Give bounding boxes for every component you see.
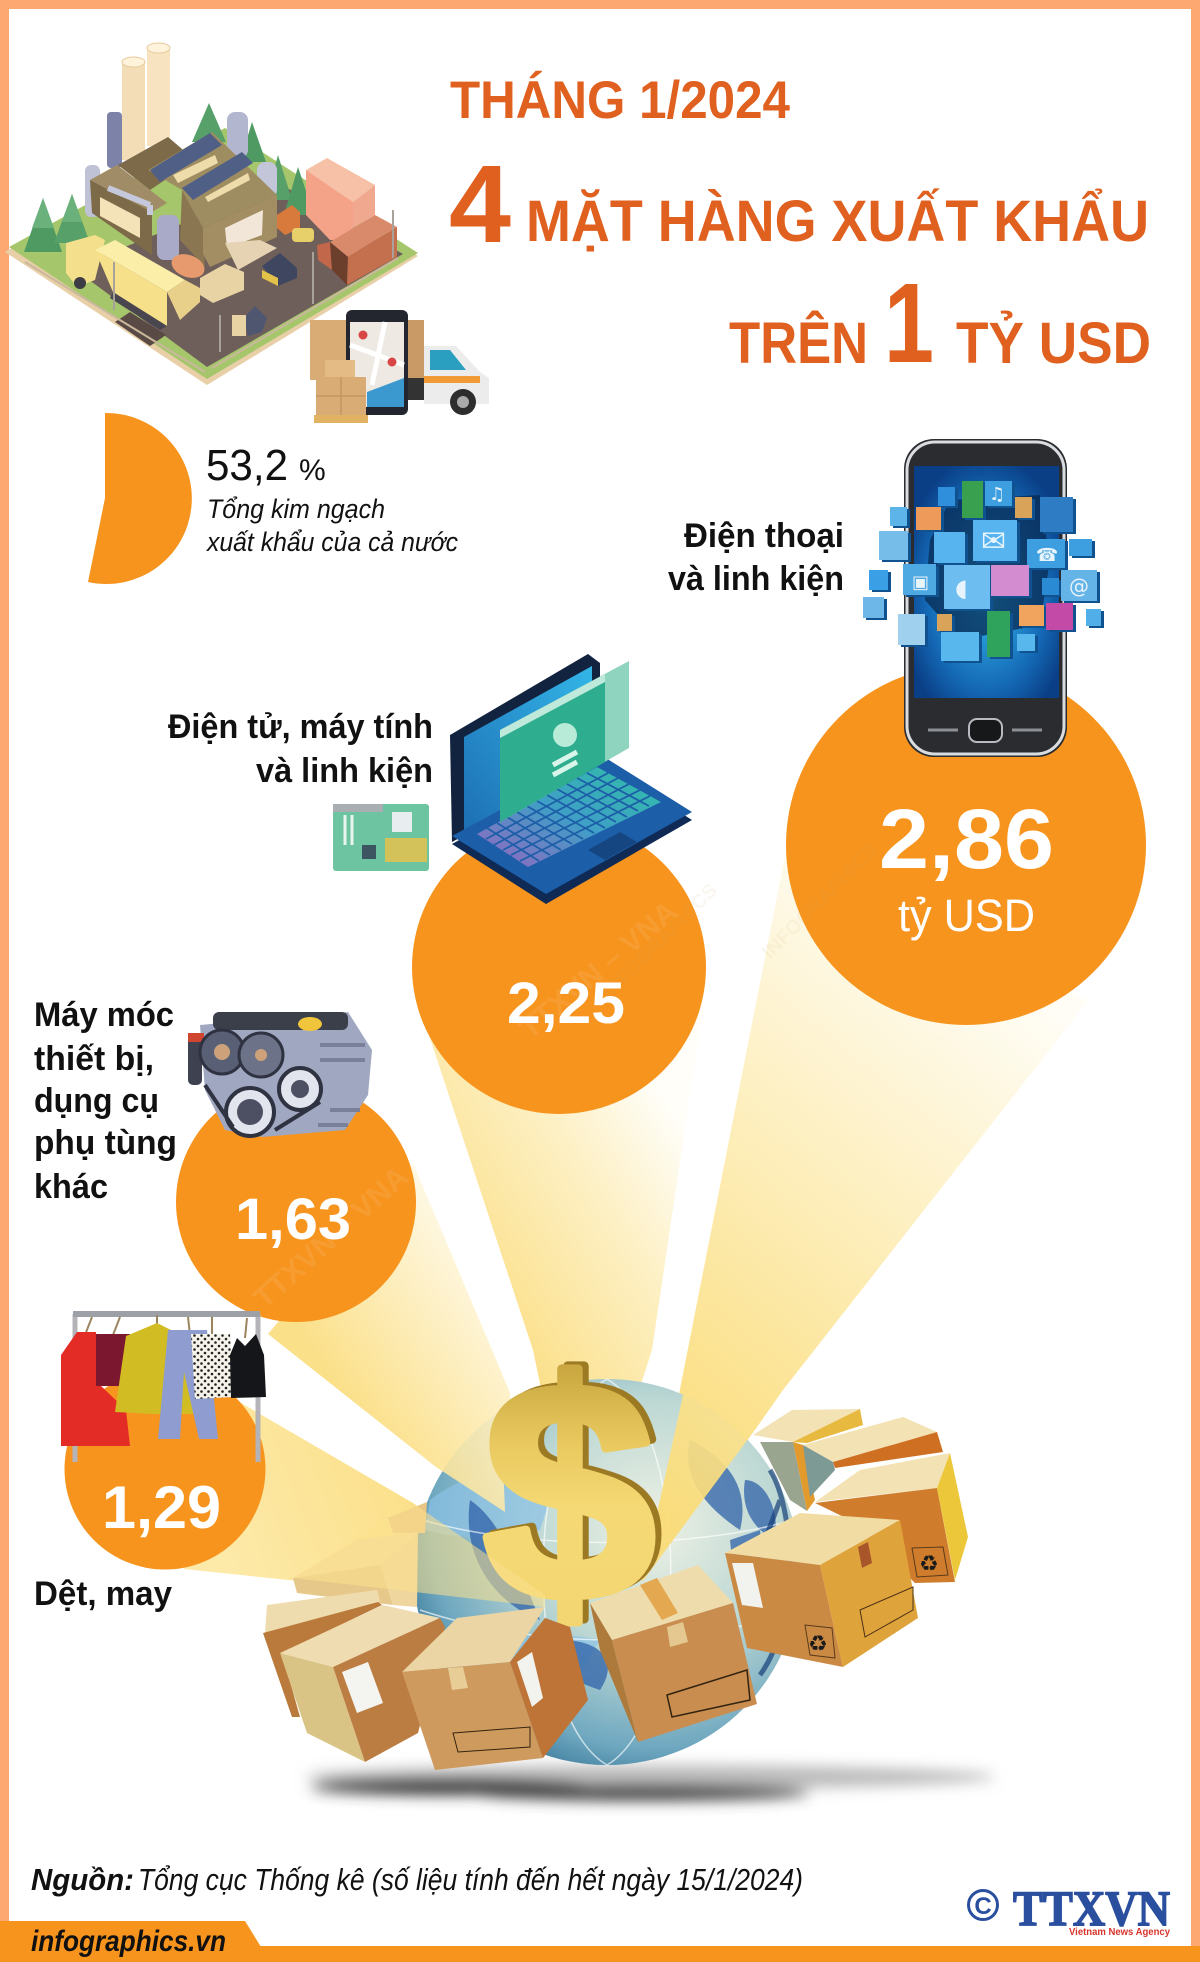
beam: textile: [184, 1403, 545, 1607]
title digit 4: 4: [449, 143, 511, 266]
logo tagline: Vietnam News Agency: [1069, 1927, 1170, 1938]
watermarks: TTXVN – VNA: [513, 895, 684, 1045]
globe: [414, 1379, 800, 1765]
box: far right: [815, 1453, 968, 1583]
dollar sign: $: [489, 1315, 661, 1662]
watermarks: INFOGRAPHICS: [598, 880, 722, 1004]
globe and cargo boxes: [263, 1315, 995, 1801]
unit ty USD: tỷ USD: [898, 890, 1035, 941]
label: phones: [668, 517, 844, 598]
icon: factory illustration: [5, 43, 418, 385]
label: machinery: phụ tùng: [34, 1124, 177, 1162]
share caption line 1: Tổng kim ngạch: [207, 494, 385, 524]
copyright mark: C: [974, 1893, 992, 1920]
app glyphs: ♫: [989, 484, 1005, 505]
box: center left: [402, 1607, 588, 1770]
value 1,63: 1,63: [235, 1187, 351, 1252]
website: infographics.vn: [31, 1925, 226, 1958]
title line 3 unit: TỶ USD: [956, 311, 1151, 376]
recycling mark: [805, 1625, 835, 1658]
textile beam overlay on boxes: [293, 1503, 545, 1607]
app glyphs: ☎: [1036, 545, 1058, 566]
recycling mark: ♻: [808, 1632, 828, 1657]
recycling mark: ♻: [919, 1552, 939, 1577]
label: electronics: Điện tử, máy tính: [168, 708, 433, 746]
label: machinery: Máy móc: [34, 996, 174, 1034]
box: center: [590, 1565, 757, 1742]
icon: smartphone with apps: [863, 439, 1101, 757]
icon: delivery truck and phone map: [310, 310, 489, 423]
chimneys: [122, 43, 170, 160]
label: machinery: [34, 996, 177, 1206]
box: upper left: [293, 1532, 418, 1607]
yellow light beams: [184, 851, 1088, 1607]
source note: [31, 1862, 803, 1897]
logo TTXVN: [968, 1880, 1170, 1938]
circle: textile value: [64, 1368, 266, 1570]
value 1,29: 1,29: [102, 1474, 221, 1541]
title line 1: THÁNG 1/2024: [450, 70, 790, 130]
trees and silos: [24, 103, 314, 252]
label: phones: và linh kiện: [668, 560, 844, 598]
label: phones: Điện thoại: [684, 517, 844, 555]
maroon skirt: [96, 1334, 130, 1386]
polka dot top: [191, 1334, 233, 1399]
app glyphs: @: [1069, 574, 1089, 598]
icon: motherboard: [333, 804, 429, 871]
shipping containers: [306, 158, 397, 285]
beam: machinery: [268, 1163, 510, 1512]
yellow coat: [115, 1323, 195, 1414]
label: machinery: khác: [34, 1168, 108, 1206]
percentage: 53,2: [206, 441, 288, 490]
percent sign: %: [299, 454, 326, 487]
label: machinery: thiết bị,: [34, 1040, 154, 1078]
watermarks: INFOGRAPHICS: [758, 840, 882, 964]
label: textile: Dệt, may: [34, 1575, 172, 1613]
jeans: [158, 1330, 218, 1439]
label: machinery: dụng cụ: [34, 1082, 159, 1120]
yellow truck: [66, 235, 220, 352]
app icon cubes: [863, 481, 1101, 661]
watermarks: [248, 594, 933, 1315]
box: left front: [280, 1605, 445, 1762]
watermarks: TTXVN – VNA: [772, 594, 933, 755]
ground shadow: [305, 1765, 995, 1801]
label: electronics: [168, 708, 433, 790]
watermarks: TTXVN – VNA: [248, 1160, 415, 1315]
circle: phones value: [786, 665, 1146, 1025]
share text: [205, 441, 458, 557]
title line 3 word: TRÊN: [729, 311, 868, 376]
value 2,86: 2,86: [879, 792, 1054, 886]
box: right top: [803, 1417, 943, 1497]
beam: phones: [642, 851, 1088, 1582]
box: far right top: [753, 1409, 863, 1511]
logo wordmark: TTXVN: [1013, 1880, 1170, 1936]
pie chart 53.2%: [88, 413, 192, 584]
app glyphs: ◖: [955, 574, 968, 602]
title line 2: MẶT HÀNG XUẤT KHẨU: [526, 189, 1149, 254]
red dress: [61, 1332, 130, 1446]
factory ground: [5, 128, 418, 385]
beam: electronics: [427, 1000, 704, 1480]
title digit 1: 1: [884, 260, 934, 386]
circle: electronics value: [412, 820, 706, 1114]
dollar sign: $: [483, 1318, 655, 1665]
circle: machinery value: [176, 1082, 416, 1322]
box: far left: [263, 1590, 382, 1717]
source label: Nguồn:: [31, 1862, 134, 1897]
label: electronics: và linh kiện: [256, 752, 433, 790]
recycling mark: [912, 1547, 948, 1577]
footer bar: [0, 1921, 1200, 1962]
copyright mark: [968, 1890, 998, 1920]
source text: Tổng cục Thống kê (số liệu tính đến hết ngày 15/1/2024): [138, 1862, 803, 1897]
icon: engine: [188, 1012, 372, 1137]
box: small upper left: [388, 1502, 427, 1533]
black top: [230, 1334, 266, 1398]
icon: clothes rack: [61, 1314, 266, 1462]
machinery beam overlay on globe: [436, 1380, 505, 1512]
value 2,25: 2,25: [507, 971, 625, 1036]
cargo boxes and forklifts: [200, 210, 393, 336]
app glyphs: ▣: [912, 572, 929, 593]
factory building: [90, 132, 314, 282]
app glyphs: ✉: [981, 524, 1006, 559]
share caption line 2: xuất khẩu của cả nước: [205, 527, 458, 557]
beam overlay on globe: [642, 1395, 757, 1582]
app glyphs: [912, 484, 1089, 602]
icon: laptop: [450, 654, 692, 904]
title: [449, 70, 1151, 386]
box: right large: [725, 1513, 918, 1667]
